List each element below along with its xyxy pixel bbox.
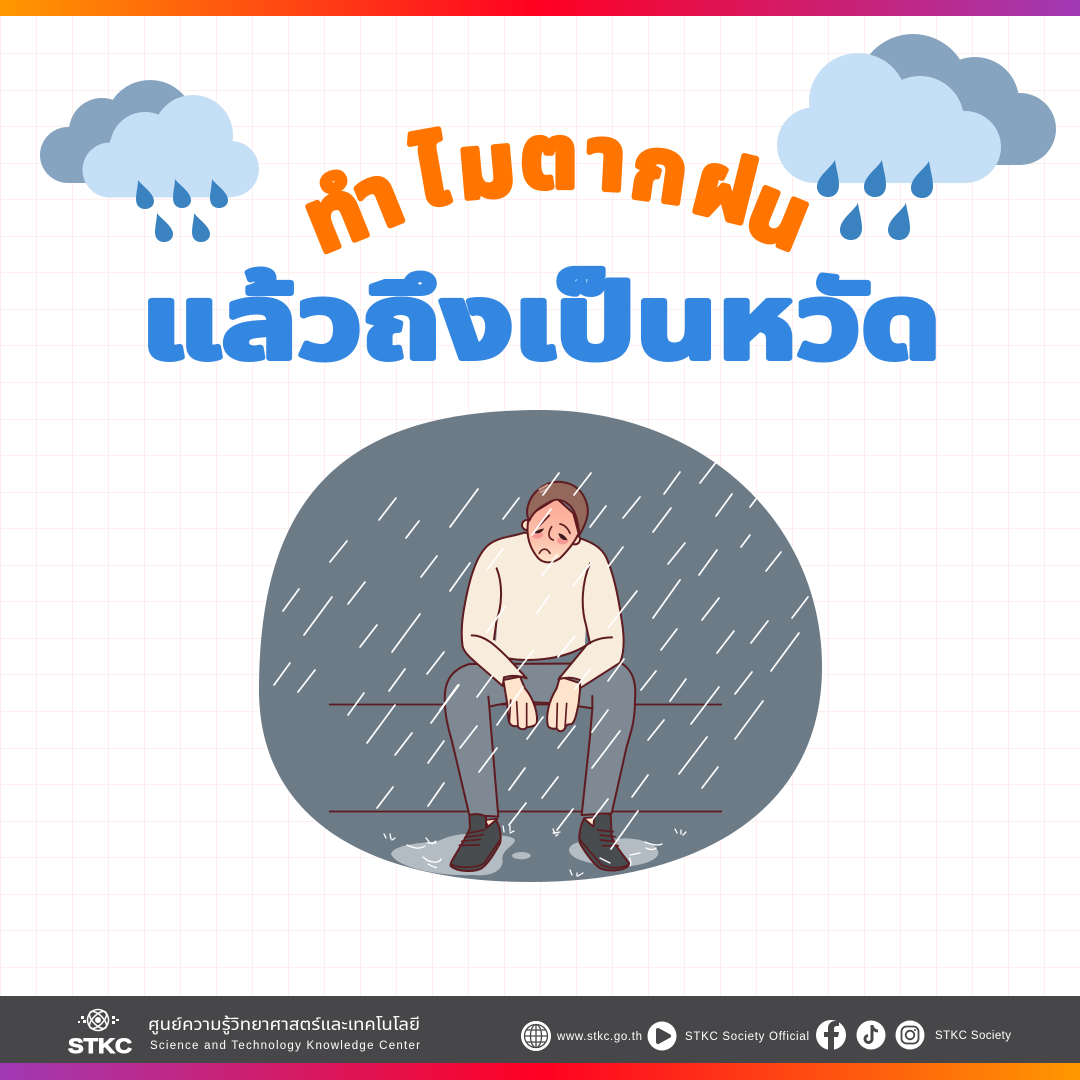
youtube label: STKC Society Official — [685, 1031, 809, 1043]
right shoe — [579, 814, 629, 871]
background blob — [259, 410, 822, 882]
hair — [527, 482, 588, 535]
icon: play button — [648, 1022, 676, 1050]
trousers — [445, 663, 635, 817]
title line 1: curved orange: า — [585, 108, 628, 209]
hands — [503, 677, 537, 729]
left shoe — [451, 814, 501, 871]
title line 1: curved orange: ต — [520, 107, 578, 206]
icon: tiktok — [856, 1020, 886, 1050]
rain streaks — [274, 461, 808, 849]
icon: left rain cloud — [40, 80, 259, 242]
facial features — [538, 515, 570, 553]
STKC logo: STKC — [68, 1035, 132, 1058]
title line 2: blue: แล้วถึงเป็นหวัด — [141, 265, 941, 381]
title line 1: curved orange: ฝ — [684, 132, 767, 243]
icon: instagram — [896, 1020, 924, 1050]
instagram label: STKC Society — [935, 1030, 1011, 1042]
title line 1: curved orange — [290, 107, 824, 271]
title line 1: curved orange: ก — [626, 117, 694, 223]
title line 1: curved orange: ทำ — [290, 144, 415, 271]
lower body — [391, 663, 658, 875]
icon: facebook — [816, 1020, 846, 1050]
title line 1: curved orange: น — [735, 156, 824, 269]
head — [522, 520, 532, 530]
top gradient bar — [0, 0, 1080, 16]
STKC logo — [68, 1009, 132, 1058]
illustration: man in the rain — [259, 410, 822, 882]
organisation name: ศูนย์ความรู้วิทยาศาสตร์และเทคโนโลยี — [148, 1014, 420, 1036]
sweater — [462, 533, 624, 688]
icon: right rain cloud — [777, 34, 1056, 240]
puddles — [391, 834, 658, 875]
icon: website globe — [521, 1021, 551, 1051]
organisation name: Science and Technology Knowledge Center — [150, 1040, 420, 1052]
title line 1: curved orange: ไ — [407, 122, 455, 225]
bottom gradient bar — [0, 1063, 1080, 1080]
upper body — [462, 482, 624, 688]
organisation name — [148, 1014, 420, 1052]
skin at ankles — [485, 817, 595, 830]
footer bar — [0, 996, 1080, 1063]
title line 1: curved orange: ม — [454, 114, 519, 217]
bench lines — [329, 704, 722, 812]
website: www.stkc.go.th — [556, 1031, 642, 1043]
splashes — [362, 826, 686, 876]
